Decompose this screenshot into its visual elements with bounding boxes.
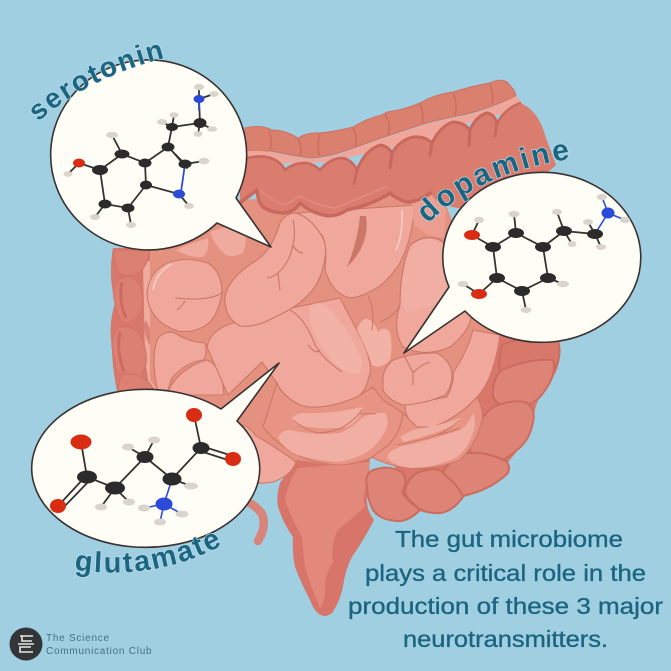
vein: under dopamine tail <box>403 353 430 385</box>
label: serotonin: serotonin <box>30 44 164 120</box>
loop: central U <box>297 205 415 298</box>
vein: S fold <box>267 220 303 290</box>
speech bubble: dopamine <box>404 172 641 353</box>
lobes under serotonin bubble <box>176 225 246 257</box>
highlight: central U <box>396 210 402 250</box>
molecule: glutamate <box>50 408 241 526</box>
carbons <box>485 226 603 296</box>
illustration: large and small intestine <box>111 80 560 616</box>
speech bubble: glutamate <box>32 363 279 547</box>
molecule: dopamine <box>458 194 630 313</box>
heteroatoms <box>173 190 185 198</box>
molecule: serotonin <box>64 84 218 228</box>
transverse colon lower band <box>240 103 556 216</box>
lobe: lower center upper <box>292 407 363 428</box>
lobe: tall lighter <box>310 303 363 374</box>
vein: central lower <box>290 310 342 372</box>
hydrogens <box>64 84 218 228</box>
pale strip <box>143 258 172 395</box>
heteroatoms <box>602 208 614 218</box>
caption text: plays a critical role in the <box>365 560 646 586</box>
highlight: left round <box>153 264 172 290</box>
ascending colon <box>111 248 172 398</box>
carbons <box>92 118 206 212</box>
transverse colon upper band <box>245 80 516 158</box>
descending colon <box>366 330 560 521</box>
vein: lower center <box>293 410 376 433</box>
transverse colon haustra lines <box>269 84 493 156</box>
logo mark <box>10 628 42 660</box>
speech bubble: serotonin <box>51 60 271 250</box>
vein: lower right <box>397 420 460 445</box>
fold: central U <box>347 216 367 267</box>
caption text: neurotransmitters. <box>403 626 608 652</box>
lobe: lower center main <box>278 413 388 462</box>
logo: The Science Communication Club <box>10 628 152 660</box>
logo wordmark: Communication Club <box>46 646 152 657</box>
appendix <box>240 498 264 541</box>
veins: heart region <box>368 295 402 365</box>
loop: S fold <box>225 213 326 326</box>
transverse colon scallop folds <box>240 103 520 216</box>
loop: beside glutamate tail <box>235 425 296 483</box>
patch beside dopamine label <box>412 196 446 238</box>
caption text: The gut microbiome <box>395 526 623 552</box>
hydrogens <box>95 436 198 526</box>
small intestine base <box>150 190 495 483</box>
caption text: production of these 3 major <box>348 593 663 619</box>
transverse colon bottom rim <box>240 190 430 216</box>
heteroatoms <box>156 498 172 510</box>
label: dopamine: dopamine <box>420 144 569 222</box>
lower right region <box>372 397 482 468</box>
lobe: right inner <box>402 239 450 312</box>
lobe: lower right main <box>387 413 475 468</box>
loop: tucked lobe lower left <box>154 332 206 395</box>
loop: left round <box>147 260 222 332</box>
lobe: heart <box>357 319 392 367</box>
vein: left round <box>175 292 223 310</box>
loop: under dopamine tail <box>383 353 452 405</box>
caption text <box>348 526 663 652</box>
loop: right, beneath dopamine tail <box>397 238 472 352</box>
rectum <box>277 458 374 616</box>
lobe: lower right small <box>400 418 461 442</box>
loop: base lobe lower left <box>166 360 224 395</box>
bonds <box>463 197 625 310</box>
lower center region <box>263 383 403 465</box>
loop: large central lower <box>207 298 370 409</box>
logo wordmark: The Science <box>46 633 110 644</box>
small intestine loops <box>147 205 500 483</box>
hydrogens <box>458 194 630 313</box>
bonds <box>58 415 233 522</box>
bonds <box>68 87 214 225</box>
carbons <box>77 442 210 494</box>
transverse colon inner strip <box>240 96 528 165</box>
label: glutamate: glutamate <box>75 533 220 578</box>
transverse colon lighter bottom strip <box>258 186 388 208</box>
loop: far right long <box>405 330 500 427</box>
